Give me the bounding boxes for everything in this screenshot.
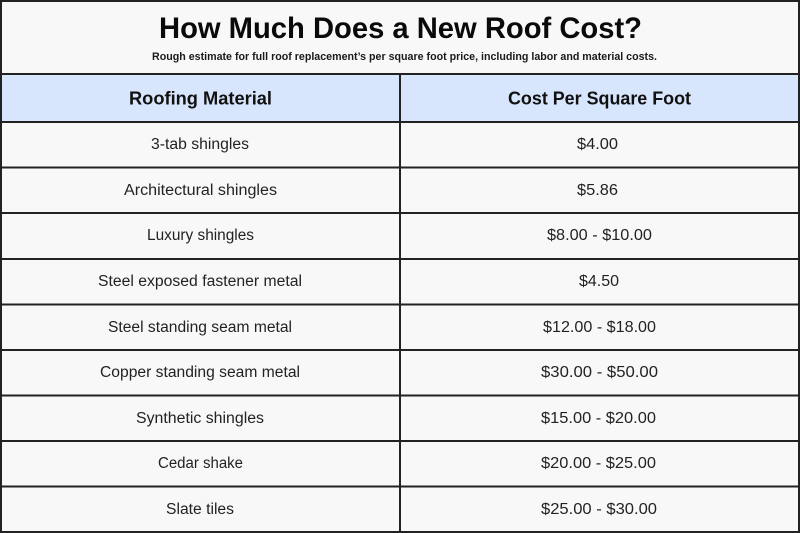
panel: material column: Steel standing seam metal xyxy=(108,319,292,336)
subtitle: Rough estimate for full roof replacement’s per square foot price, including labor and material costs. xyxy=(152,51,657,63)
panel: material column: Synthetic shingles xyxy=(136,410,264,427)
panel: cost column: $8.00 - $10.00 xyxy=(547,227,652,244)
panel: cost column xyxy=(541,136,658,518)
panel: material column: Copper standing seam metal xyxy=(100,364,300,381)
title: How Much Does a New Roof Cost? xyxy=(159,12,642,45)
panel: cost column: $4.00 xyxy=(577,136,618,153)
panel: material column: Slate tiles xyxy=(166,501,234,518)
panel: cost column: $15.00 - $20.00 xyxy=(541,410,656,427)
panel: cost column: $5.86 xyxy=(577,182,618,199)
panel: material column: Luxury shingles xyxy=(147,227,254,244)
panel: cost column: $20.00 - $25.00 xyxy=(541,455,656,472)
panel: cost column: $12.00 - $18.00 xyxy=(543,319,656,336)
panel: cost column: $25.00 - $30.00 xyxy=(541,501,657,518)
panel: header row xyxy=(1,74,799,122)
panel: material column xyxy=(98,136,302,518)
panel: cost column: $4.50 xyxy=(579,273,619,290)
column heading: cost per square foot: Cost Per Square Foot xyxy=(508,88,691,108)
panel: material column: Architectural shingles xyxy=(124,182,277,199)
panel: material column: Cedar shake xyxy=(158,455,243,472)
panel: title block xyxy=(152,12,657,63)
panel: material column: 3-tab shingles xyxy=(151,136,249,153)
panel: cost column: $30.00 - $50.00 xyxy=(541,364,658,381)
panel: material column: Steel exposed fastener metal xyxy=(98,273,302,290)
column heading: roofing material: Roofing Material xyxy=(129,88,272,108)
